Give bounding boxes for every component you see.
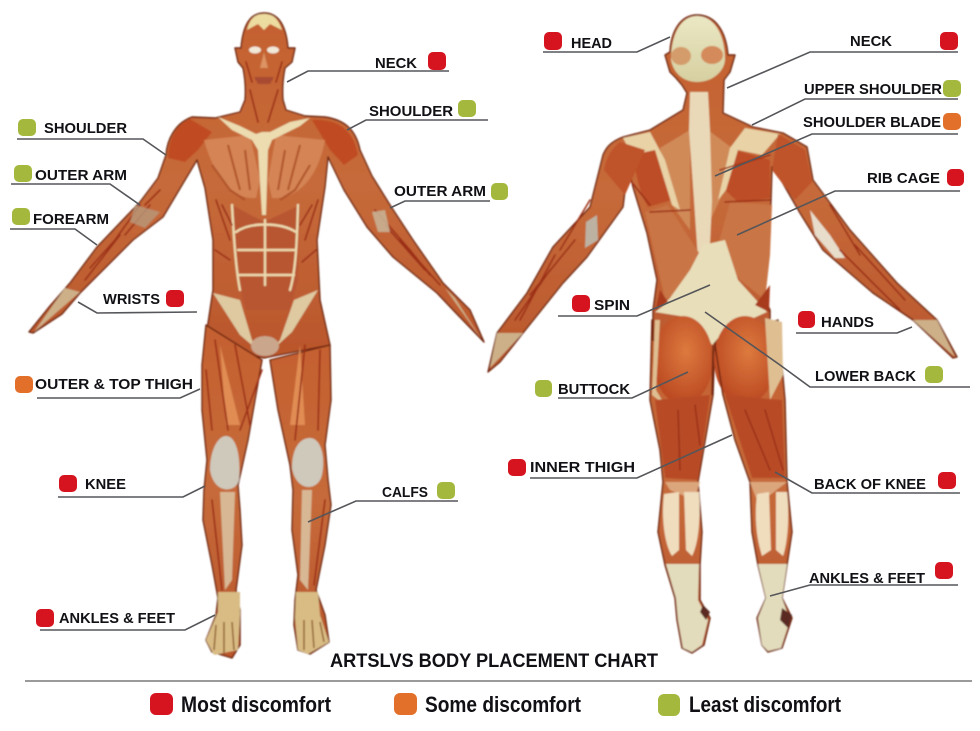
spine tendon	[689, 92, 712, 290]
legend	[150, 692, 842, 717]
label: buttock	[535, 372, 688, 398]
label: knee	[58, 475, 205, 497]
label: ankles and feet, back	[770, 562, 958, 596]
ankles and feet	[206, 592, 240, 655]
label: shoulder blade: SHOULDER BLADE	[803, 114, 941, 131]
label: spin: SPIN	[594, 297, 630, 314]
legend: least discomfort: Least discomfort	[689, 692, 842, 717]
back legs	[650, 320, 715, 653]
label: back of knee: BACK OF KNEE	[814, 476, 926, 493]
label: shoulder, front right: SHOULDER	[369, 103, 453, 120]
label: upper shoulder	[752, 80, 961, 125]
label: ankles and feet, front: ANKLES & FEET	[59, 610, 175, 627]
label: neck, back: NECK	[850, 33, 892, 50]
lats	[645, 205, 705, 300]
label: neck, back	[727, 32, 958, 88]
label: inner thigh: INNER THIGH	[530, 459, 635, 476]
label: forearm: FOREARM	[33, 211, 109, 228]
legend: most discomfort: Most discomfort	[181, 692, 332, 717]
label: outer arm, front left	[11, 165, 140, 205]
abdomen	[232, 205, 300, 310]
label: shoulder, front right	[347, 100, 488, 130]
label: buttock: BUTTOCK	[558, 381, 630, 398]
front figure	[29, 13, 484, 658]
label: hands: HANDS	[821, 314, 874, 331]
label: ankles and feet, front	[36, 609, 215, 630]
label: hands	[796, 311, 912, 333]
label: back of knee	[775, 472, 960, 493]
hamstrings	[655, 395, 710, 480]
lower legs and heels	[666, 564, 708, 652]
deltoids and arms	[604, 142, 645, 195]
chest muscles	[204, 135, 260, 198]
pelvic tendons	[213, 293, 260, 352]
lower back pale diamond	[655, 240, 767, 345]
back torso, arms and head	[488, 15, 957, 372]
label: spin	[558, 285, 710, 316]
legend: some discomfort: Some discomfort	[425, 692, 582, 717]
shoulder blade muscles	[633, 148, 672, 207]
label: shoulder, front left: SHOULDER	[44, 120, 127, 137]
label: shoulder blade	[715, 113, 961, 176]
label: inner thigh	[508, 435, 732, 478]
collar and sternum tendons	[218, 117, 310, 215]
back figure	[488, 15, 957, 653]
label: rib cage: RIB CAGE	[867, 170, 940, 187]
label: outer and top thigh: OUTER & TOP THIGH	[35, 376, 193, 393]
label: knee: KNEE	[85, 476, 126, 493]
label: wrists: WRISTS	[103, 291, 160, 308]
label: lower back: LOWER BACK	[815, 368, 916, 385]
label: outer arm, front right	[390, 183, 508, 208]
calves	[663, 492, 679, 556]
thigh details	[220, 345, 305, 425]
deltoids	[168, 119, 212, 162]
arm details	[85, 190, 440, 285]
label: upper shoulder: UPPER SHOULDER	[804, 81, 942, 98]
chart title: ARTSLVS BODY PLACEMENT CHART	[330, 651, 658, 672]
label: neck, front	[287, 52, 449, 82]
label: head	[543, 32, 670, 52]
label: ankles and feet, back: ANKLES & FEET	[809, 570, 925, 587]
label: lower back	[705, 312, 970, 387]
label: head: HEAD	[571, 35, 612, 52]
label: outer and top thigh	[15, 376, 200, 398]
label: shoulder, front left	[17, 119, 166, 155]
face and scalp details	[247, 14, 282, 30]
label: calfs: CALFS	[382, 484, 428, 501]
shins	[220, 492, 235, 590]
kneecaps	[210, 436, 239, 489]
label: rib cage	[737, 169, 964, 235]
label: outer arm, front left: OUTER ARM	[35, 167, 127, 184]
front torso, arms and head	[29, 13, 484, 358]
front legs	[202, 325, 262, 658]
label: wrists	[78, 290, 197, 313]
buttocks	[653, 316, 713, 404]
label: neck, front: NECK	[375, 55, 417, 72]
rhomboids	[660, 130, 690, 230]
label: forearm	[10, 208, 109, 245]
skull	[671, 16, 725, 82]
label: outer arm, front right: OUTER ARM	[394, 183, 486, 200]
backs of knees	[665, 482, 787, 500]
label: calfs	[308, 482, 458, 522]
scapula tendons	[623, 132, 680, 210]
